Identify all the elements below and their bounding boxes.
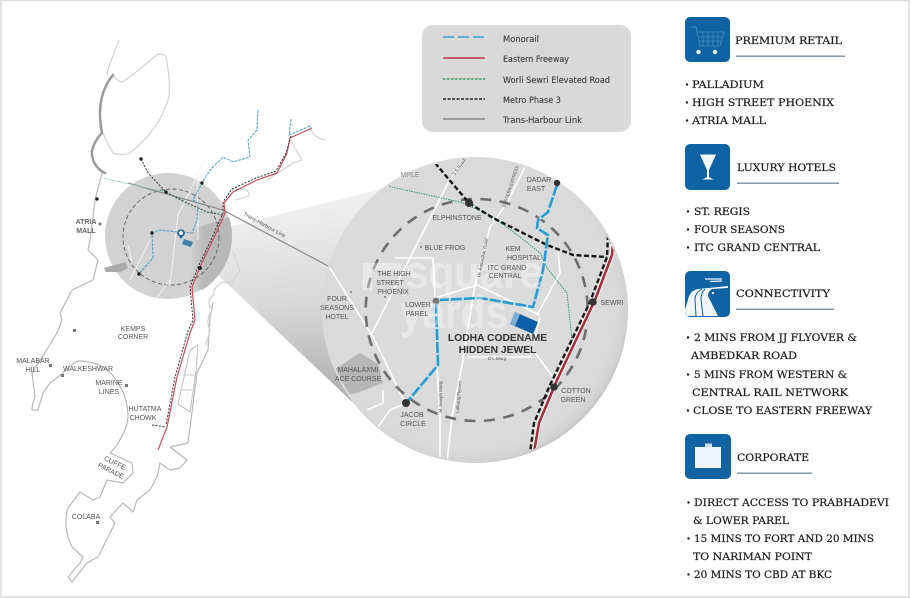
- legend: eastern freeway: [443, 54, 569, 64]
- small map labels: CUFFE: [103, 455, 127, 472]
- magnified labels: CENTRAL: [489, 273, 521, 280]
- list: HIGH STREET PHOENIX: [692, 97, 835, 109]
- magnified labels: EAST: [527, 186, 546, 193]
- legend: worli sewri: Worli Sewri Elevated Road: [503, 75, 610, 85]
- Worli Sewri small map line: [103, 178, 222, 213]
- list: 5 MINS FROM WESTERN &: [694, 369, 847, 381]
- magnified labels: [320, 157, 624, 428]
- list: DIRECT ACCESS TO PRABHADEVI: [694, 497, 889, 509]
- magnified labels: THE HIGH: [377, 271, 411, 278]
- magnified labels: PHOENIX: [377, 289, 409, 296]
- magnified labels: JACOB: [400, 412, 424, 419]
- panel: premium retail: [685, 17, 845, 127]
- Monorail big: [407, 185, 557, 402]
- small map labels: KEMPS: [121, 326, 146, 333]
- magnified labels: M Joseph Marg: [438, 381, 443, 413]
- panel: connectivity: [685, 271, 873, 417]
- zoom cone: [218, 188, 400, 411]
- watermark: square: [405, 246, 543, 298]
- magnified labels: ITC GRAND: [488, 265, 526, 272]
- heading: PREMIUM RETAIL: [735, 35, 842, 47]
- map: Mumbai coastline: [32, 40, 325, 582]
- list: [686, 79, 835, 127]
- watermark: [400, 246, 543, 338]
- magnified labels: SEASONS: [320, 305, 354, 312]
- small map labels: LINES: [99, 389, 119, 396]
- list: TO NARIMAN POINT: [693, 551, 812, 563]
- list: PALLADIUM: [692, 79, 764, 91]
- blue frog and phoenix markers: [350, 246, 422, 298]
- small map labels: PARADE: [96, 462, 125, 481]
- magnified labels: FOUR: [327, 296, 347, 303]
- panel: luxury hotels: [685, 144, 839, 254]
- Eastern Freeway small map: [158, 128, 312, 450]
- magnified labels: Dr. Ambedkar Road: [476, 237, 489, 277]
- Eastern Freeway big: [534, 243, 613, 452]
- magnified labels: DADAR: [527, 177, 551, 184]
- magnified labels: KEM: [505, 246, 521, 253]
- list: [687, 497, 889, 581]
- magnified labels: HOSPITAL: [507, 255, 541, 262]
- project name: HIDDEN JEWEL: [459, 345, 536, 356]
- magnified labels: MAHALAXMI: [337, 367, 379, 374]
- site building: [510, 312, 538, 334]
- small map labels: [16, 219, 162, 521]
- legend: [422, 25, 631, 132]
- white roads: [328, 160, 560, 462]
- legend: trans-harbour: Trans-Harbour Link: [502, 115, 582, 125]
- list: [687, 332, 873, 417]
- watermark mark: [363, 263, 402, 290]
- site building small: [182, 239, 193, 247]
- small map labels: MALL: [76, 228, 96, 235]
- list: [687, 206, 820, 254]
- Trans-Harbour Link label: Trans-Harbour Link: [242, 212, 286, 240]
- Metro Phase 3 big: [435, 163, 608, 453]
- list: CLOSE TO EASTERN FREEWAY: [693, 405, 873, 417]
- legend: metro: Metro Phase 3: [503, 95, 561, 105]
- magnified labels: ELPHINSTONE: [432, 215, 482, 222]
- list: 20 MINS TO CBD AT BKC: [694, 569, 832, 581]
- icon: site pin: [178, 230, 184, 239]
- list: ITC GRAND CENTRAL: [694, 242, 820, 254]
- magnified labels: GREEN: [561, 397, 585, 404]
- magnified labels: BLUE FROG: [425, 245, 465, 252]
- small map labels: HILL: [26, 367, 40, 374]
- list: ATRIA MALL: [691, 115, 766, 127]
- small map labels: WALKESHWAR: [63, 366, 113, 373]
- small map labels: CHOWK: [130, 415, 157, 422]
- small map labels: HUTATMA: [129, 406, 162, 413]
- magnified labels: MPLE: [400, 172, 420, 179]
- list: & LOWER PAREL: [693, 515, 789, 527]
- Monorail small map: [139, 110, 310, 274]
- magnified labels: STREET: [376, 280, 405, 287]
- list: ST. REGIS: [694, 206, 750, 218]
- small map labels: MARINE: [95, 380, 123, 387]
- small map labels: ATRIA: [76, 219, 96, 226]
- list: CENTRAL RAIL NETWORK: [692, 387, 848, 399]
- magnified labels: SEWRI: [601, 300, 624, 307]
- small map labels: COLABA: [72, 514, 101, 521]
- small map markers: [49, 222, 128, 524]
- magnified labels: Lalbaug Flyover: [455, 380, 462, 413]
- icon: road: [685, 271, 730, 317]
- magnified labels: CIRCLE: [400, 421, 426, 428]
- watermark: yards: [400, 286, 508, 338]
- small locator circle: [104, 160, 235, 300]
- project name: [448, 333, 547, 356]
- magnified labels: PAREL: [406, 311, 428, 318]
- icon: shopping cart: [685, 17, 730, 62]
- magnified labels: D L Marg: [488, 356, 507, 361]
- legend: trans-harbour: [443, 115, 582, 125]
- legend: eastern freeway: Eastern Freeway: [503, 54, 569, 64]
- magnified labels: LOWER: [405, 302, 431, 309]
- magnified labels: EASTERN EXPRESS: [501, 165, 520, 208]
- stations: [402, 180, 597, 407]
- heading: LUXURY HOTELS: [737, 162, 836, 174]
- list: 2 MINS FROM JJ FLYOVER &: [694, 332, 857, 344]
- panel: corporate: [685, 434, 889, 581]
- magnified labels: S S Road: [451, 157, 467, 176]
- race course area: [336, 353, 383, 394]
- project name: LODHA CODENAME: [448, 333, 547, 344]
- Metro small map: [141, 136, 291, 427]
- small map labels: CORNER: [118, 334, 148, 341]
- Worli Sewri road big: [387, 186, 572, 340]
- icon: cocktail glass: [685, 144, 730, 190]
- magnified map circle: [320, 157, 628, 463]
- legend: monorail: [443, 34, 539, 44]
- list: FOUR SEASONS: [694, 224, 785, 236]
- small map nodes: [95, 157, 204, 276]
- map: thick grey coastal road: [92, 75, 113, 173]
- small map labels: MALABAR: [16, 358, 50, 365]
- magnified labels: HOTEL: [325, 314, 349, 321]
- heading: CONNECTIVITY: [736, 288, 831, 300]
- list: 15 MINS TO FORT AND 20 MINS: [694, 533, 874, 545]
- magnified labels: COTTON: [561, 388, 591, 395]
- icon: briefcase: [685, 434, 731, 479]
- legend: metro: [443, 95, 561, 105]
- list: AMBEDKAR ROAD: [690, 350, 797, 362]
- heading: CORPORATE: [737, 452, 809, 464]
- Trans-Harbour Link line: [128, 183, 328, 266]
- dashed ring: [366, 199, 588, 421]
- legend: monorail: Monorail: [503, 34, 539, 44]
- magnified labels: ACE COURSE: [335, 376, 381, 383]
